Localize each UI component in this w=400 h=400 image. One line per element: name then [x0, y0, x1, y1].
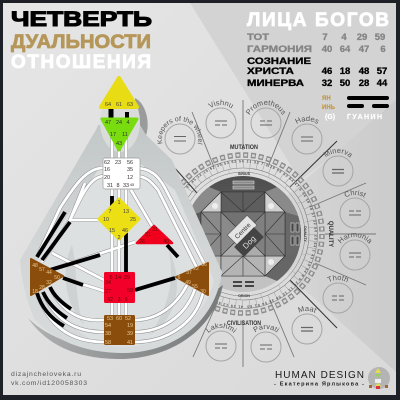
circle: Hades	[292, 116, 322, 154]
centre: solar plexus: 55	[192, 284, 198, 290]
corner dots	[212, 203, 274, 265]
centre: sacral: 27	[105, 289, 111, 295]
row: Minerva: 44	[377, 78, 388, 89]
centre: head: 64	[105, 102, 111, 108]
body inner area	[36, 160, 214, 347]
octagon of tiles	[201, 192, 285, 276]
right disc section	[243, 193, 301, 275]
centre: heart: 26	[139, 239, 145, 245]
centre: ajna: 4	[126, 120, 130, 126]
row: Harmonia: 40	[322, 44, 332, 55]
wheel labels: ORION	[238, 294, 250, 298]
row: Christ consciousness: 46	[322, 66, 332, 77]
centre: sacral: 34	[105, 280, 111, 286]
lower right sector	[265, 252, 298, 281]
circle: Christ	[340, 190, 370, 228]
centre: throat: 31	[107, 183, 113, 189]
circle: Harmonia	[338, 233, 372, 270]
row: Minerva: 28	[359, 78, 369, 89]
circle: Prometheus	[246, 100, 286, 138]
title line 1: ЧЕТВЕРТЬ	[11, 8, 152, 31]
centre: solar plexus: 49	[185, 280, 191, 286]
centre: G: 1	[117, 200, 121, 206]
centre: heart: 51	[145, 232, 151, 238]
centre: G: 13	[123, 209, 129, 215]
centre: sacral: 59	[127, 288, 133, 294]
centre: spleen: 48	[32, 263, 38, 269]
centre: G: 10	[103, 217, 109, 223]
centre: spleen: 18	[32, 289, 38, 295]
centre: ajna: 11	[122, 132, 128, 138]
centre: sacral	[104, 272, 135, 303]
circle: Lakshmi: Lakshmi	[206, 322, 237, 333]
centre: heart: 21	[152, 227, 158, 233]
logo: mini bodygraph	[368, 367, 390, 389]
centre: sacral: 3	[117, 297, 121, 303]
centre: throat: 35	[127, 167, 133, 173]
row: Harmonia: 64	[340, 44, 351, 55]
wheel labels: CIVILISATION	[227, 321, 261, 327]
row: Thoth: 29	[357, 32, 367, 43]
yin yang legend: ЯН	[322, 96, 331, 102]
body rim	[28, 285, 223, 359]
centre: G: 7	[108, 209, 112, 215]
top bars	[233, 181, 254, 189]
row: Thoth: ТОТ	[247, 32, 269, 43]
bottom bars	[233, 281, 254, 287]
centre: root: 52	[125, 316, 131, 322]
centre: head	[101, 78, 137, 108]
row: Christ consciousness: СОЗНАНИЕ	[247, 56, 311, 67]
bodygraph	[20, 78, 223, 359]
centre: throat: 12	[127, 175, 133, 181]
wheel labels: MUTATION	[230, 145, 258, 151]
spokes	[150, 100, 376, 367]
centre: heart: 40	[163, 239, 169, 245]
circle: Thoth: Thoth	[326, 275, 348, 282]
centre: ajna: 43	[116, 141, 122, 147]
centre: solar plexus: 22	[193, 266, 199, 272]
body shadows	[66, 245, 177, 335]
row: Minerva: 50	[340, 78, 350, 89]
centre: root	[104, 315, 135, 346]
centre: ajna: 47	[105, 120, 111, 126]
author signature: HUMAN DESIGN	[275, 370, 364, 381]
yin yang legend: (G)	[325, 114, 335, 121]
circle: Vishnu	[206, 100, 236, 138]
top right background panel	[190, 3, 396, 180]
lower disc section	[202, 234, 284, 292]
circle: Minerva: Minerva	[323, 148, 352, 158]
centre: head: 61	[116, 102, 122, 108]
centre: root: 38	[105, 331, 111, 337]
centre: throat: 16	[104, 167, 110, 173]
centre: throat: 23	[115, 160, 121, 166]
circle: Thoth	[322, 275, 354, 314]
footer links	[11, 371, 87, 387]
centre: root: 53	[107, 316, 113, 322]
circle: Minerva	[322, 148, 354, 186]
centre: spleen	[31, 259, 63, 295]
wheel labels: DUALITY	[303, 226, 307, 242]
wheel labels: SIRIUS	[238, 172, 251, 176]
centre: throat: 62	[104, 160, 110, 166]
centre: root: 19	[127, 323, 133, 329]
row: Christ consciousness: 57	[377, 66, 387, 77]
centre: sacral: 5	[109, 275, 113, 281]
title line 3: ОТНОШЕНИЯ	[11, 52, 151, 73]
centre: spleen: 57	[39, 267, 45, 273]
outer glyph squares	[164, 155, 322, 313]
centre: G: 25	[130, 217, 136, 223]
centre: sacral: 14	[115, 275, 121, 281]
centre: solar plexus: 30	[200, 289, 206, 295]
dark disc	[185, 176, 301, 292]
centre: spleen: 28	[39, 285, 45, 291]
centre: ajna: 17	[110, 132, 116, 138]
footer links: vk.com/id120058303	[11, 380, 87, 387]
circle: Lakshmi	[206, 322, 237, 362]
row: Christ consciousness: 18	[340, 66, 350, 77]
yin yang legend: ИНЬ	[322, 105, 336, 111]
centre: ajna	[102, 119, 137, 150]
god circles	[157, 100, 372, 362]
gate number ring	[168, 160, 318, 308]
circle: Christ: Christ	[344, 190, 366, 198]
wheel labels	[227, 145, 333, 327]
right bars	[291, 223, 299, 245]
centre: solar plexus: 37	[186, 270, 192, 276]
row: Harmonia: ГАРМОНИЯ	[247, 44, 312, 55]
centre: solar plexus: 36	[201, 262, 207, 268]
row: Christ consciousness: ХРИСТА	[247, 66, 294, 77]
wheel labels: QUALITY	[327, 221, 333, 247]
gods table	[247, 10, 389, 121]
centre: ajna: 24	[116, 120, 122, 126]
footer links: dizajncheloveka.ru	[11, 371, 81, 378]
centre: root: 54	[105, 323, 111, 329]
circle: Keepers of the wheel: Keepers of the wheel	[157, 116, 202, 144]
head shadow	[135, 98, 148, 140]
channels	[37, 108, 205, 342]
centre tile	[227, 215, 257, 245]
centre: sacral: 9	[124, 297, 128, 303]
centre: root: 39	[127, 331, 133, 337]
centre: head: 63	[127, 102, 133, 108]
centre: throat: 56	[127, 160, 133, 166]
gate numbers: 41 19 13 49 30 55 37 63 22 36 25 17 21 51 42 3 27 24 2 23 8 20 16 35 45 12 15 52 39 53 62 56 31 33 7 4 29 59 40 64 47 6 46 18 48 57 32 50 28 44 1 43 14 34 9 5 26 11 10 58 38 54 61 60	[186, 160, 318, 308]
centre: solar plexus: 6	[178, 275, 181, 281]
row: Harmonia: 47	[359, 44, 369, 55]
centre: sacral: 42	[107, 297, 113, 303]
row: Thoth	[247, 32, 385, 43]
body silhouette	[20, 125, 222, 353]
upper left sector	[188, 187, 221, 216]
centre: spleen: 50	[54, 275, 60, 281]
row: Harmonia	[247, 44, 386, 55]
row: Minerva: МИНЕРВА	[247, 78, 304, 89]
centre: G: 2	[117, 235, 121, 241]
centre: G	[99, 199, 139, 241]
title block	[11, 8, 152, 73]
circle: Parvati: Parvati	[253, 325, 280, 332]
circle: Maat: Maat	[298, 306, 317, 313]
circle: Parvati	[250, 325, 282, 362]
centre: spleen: 32	[46, 280, 52, 286]
circle: Harmonia: Harmonia	[338, 233, 372, 244]
centre: throat: 33	[123, 183, 129, 189]
centre: G: 15	[109, 228, 115, 234]
row: Minerva: 32	[322, 78, 332, 89]
centre: root: 41	[127, 340, 133, 346]
row: Christ consciousness: 48	[359, 66, 369, 77]
centre: throat: 20	[104, 175, 110, 181]
centre: root: 58	[105, 340, 111, 346]
circle: Vishnu: Vishnu	[208, 100, 234, 108]
row: Thoth: 59	[375, 32, 385, 43]
centre: throat	[103, 158, 140, 189]
dog tile	[234, 227, 264, 257]
centre: solar plexus	[176, 262, 208, 295]
yin yang legend: ГУАНИН	[347, 114, 382, 121]
centre: root: 60	[116, 316, 122, 322]
row: Thoth: 4	[341, 32, 347, 43]
centre: G: 46	[122, 228, 128, 234]
head oval	[100, 92, 140, 152]
author signature	[274, 370, 364, 388]
centre: spleen: 44	[46, 270, 52, 276]
upper right sector	[265, 187, 298, 216]
activated channel segments	[37, 108, 178, 326]
right background panel	[243, 100, 396, 372]
row: Christ consciousness	[247, 56, 387, 77]
centre: throat: 8	[116, 183, 120, 189]
centre: sacral: 29	[124, 275, 130, 281]
heading: faces of gods: ЛИЦА БОГОВ	[247, 10, 389, 31]
author signature: - Екатерина Ярлыкова -	[274, 382, 364, 388]
centre: heart	[137, 226, 172, 245]
title line 2: ДУАЛЬНОСТИ	[11, 32, 151, 53]
circle: Prometheus: Prometheus	[246, 100, 286, 115]
mandala wheel	[181, 144, 334, 327]
dog tile: Dog	[241, 234, 258, 251]
row: Minerva	[247, 78, 388, 89]
centre: throat: 45	[130, 182, 135, 187]
circle: Maat	[292, 306, 322, 344]
row: Harmonia: 6	[380, 44, 386, 55]
row: Thoth: 7	[322, 32, 328, 43]
centre tile: Centre	[234, 222, 253, 241]
circle: Hades: Hades	[295, 116, 318, 124]
yin yang legend	[322, 96, 389, 121]
